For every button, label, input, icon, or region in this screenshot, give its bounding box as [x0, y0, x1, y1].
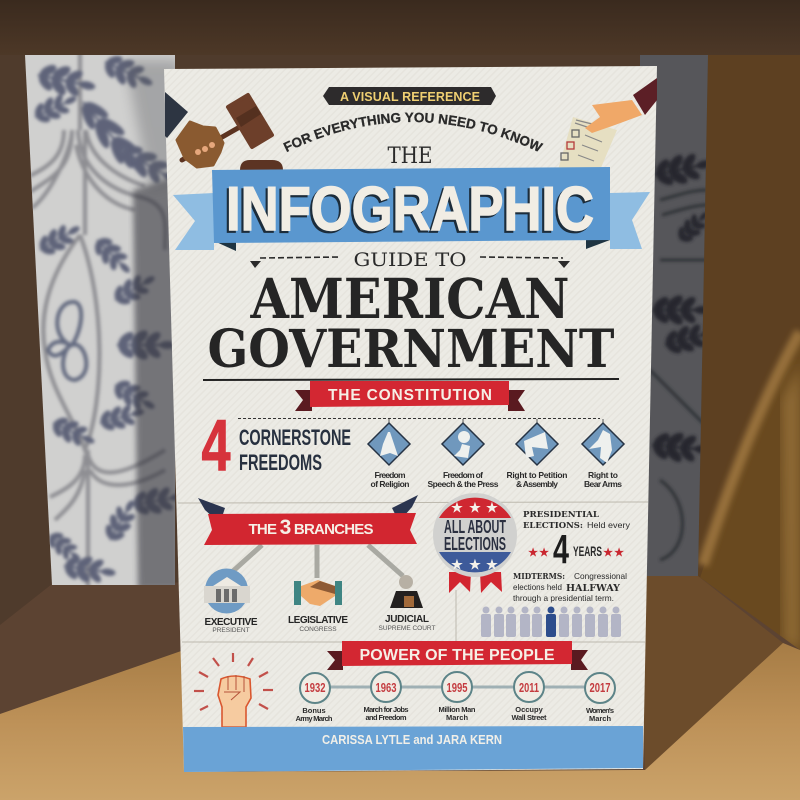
icon: legislative handshake: [294, 580, 342, 606]
heading: guide to with arrows: [250, 249, 570, 271]
text: presidential elections: Held every: [587, 520, 631, 530]
timeline of marches: Wall Street: [512, 713, 547, 722]
heading text: [239, 425, 351, 475]
icon: hand with gavel: [165, 92, 283, 170]
section: the 3 branches: [198, 495, 435, 634]
heading text: CORNERSTONE: [239, 425, 351, 450]
branch labels: SUPREME COURT: [379, 625, 435, 632]
branch labels: [204, 614, 435, 634]
timeline of marches: and Freedom: [366, 713, 407, 722]
banner: the constitution: THE CONSTITUTION: [328, 387, 492, 404]
text: presidential elections: elections held: [513, 582, 562, 592]
connector lines: [232, 545, 403, 578]
title: american government: [208, 266, 615, 380]
badge: all about elections: ELECTIONS: [444, 534, 506, 554]
text: presidential elections: ELECTIONS:: [523, 521, 583, 531]
patterned curtain, lit side: [25, 55, 175, 585]
stat: 4 years: [528, 526, 624, 572]
banner: the constitution: [295, 381, 525, 411]
branch labels: EXECUTIVE: [204, 617, 258, 628]
timeline of marches: March: [446, 713, 468, 722]
subtitle on arc: FOR EVERYTHING YOU NEED TO KNOW: [283, 112, 544, 152]
icon: raised fist: [194, 653, 273, 727]
timeline of marches: Army March: [296, 714, 333, 723]
title: american government: AMERICAN: [250, 266, 570, 331]
word: THE: THE: [388, 144, 432, 169]
freedom labels: of Religion: [370, 479, 410, 489]
timeline of marches: 2017: [590, 680, 610, 695]
timeline of marches: Bonus: [302, 706, 326, 715]
stat: 4 years: ★: [539, 547, 549, 559]
stat: 4 years: ★: [603, 547, 613, 559]
patterned curtain, shaded side: [640, 55, 708, 576]
heading text: FREEDOMS: [239, 450, 322, 475]
badge: all about elections: ★: [486, 557, 498, 572]
freedom labels: Bear Arms: [584, 479, 622, 489]
number 4: 4: [202, 406, 230, 486]
timeline of marches: Occupy: [515, 705, 544, 714]
banner: infographic: INFOGRAPHIC: [226, 175, 594, 244]
timeline of marches: 2011: [519, 680, 539, 695]
freedom labels: Freedom: [374, 470, 406, 480]
freedom labels: & Assembly: [516, 479, 558, 489]
badge: a visual reference: [323, 87, 496, 105]
icon: freedom of speech: [442, 423, 484, 465]
branch labels: CONGRESS: [299, 626, 337, 633]
badge: all about elections: ★: [469, 500, 481, 515]
text: presidential elections: HALFWAY: [566, 583, 620, 594]
timeline of marches: March for Jobs: [364, 705, 408, 714]
stat: 4 years: ★: [528, 547, 538, 559]
section: 4 cornerstone freedoms: [202, 406, 624, 489]
badge: all about elections: ★: [486, 500, 498, 515]
footer band: authors: [183, 726, 643, 772]
title: american government: GOVERNMENT: [208, 319, 615, 380]
timeline of marches: 1995: [446, 680, 468, 695]
book cover: [164, 66, 657, 772]
freedom labels: [370, 470, 622, 489]
badge: a visual reference: A VISUAL REFERENCE: [340, 90, 480, 104]
stat: 4 years: ★: [614, 547, 624, 559]
banner: power of the people: [327, 641, 588, 670]
timeline of marches: 1932: [304, 680, 326, 695]
timeline of marches: March: [589, 714, 611, 723]
badge: all about elections: ★: [451, 500, 463, 515]
icon: executive building: [204, 568, 250, 614]
banner: power of the people: POWER OF THE PEOPLE: [360, 647, 555, 664]
icon: hand marking ballot: [558, 78, 657, 170]
section: the 3 branches: THE 3 BRANCHES: [248, 516, 374, 539]
badge: all about elections: [433, 493, 517, 593]
branch labels: PRESIDENT: [212, 627, 250, 634]
stat: 4 years: 4: [553, 526, 569, 572]
freedom labels: Speech & the Press: [428, 479, 499, 489]
stat: 4 years: YEARS: [573, 543, 602, 559]
freedom labels: Freedom of: [443, 470, 483, 480]
text: presidential elections: through a presidential term.: [513, 593, 614, 603]
timeline of marches: Million Man: [438, 705, 476, 714]
ribbon: [204, 513, 417, 545]
heading: guide to with arrows: GUIDE TO: [354, 249, 466, 271]
cover paper: [164, 66, 657, 772]
text: presidential elections: PRESIDENTIAL: [523, 510, 599, 520]
freedom labels: Right to Petition: [506, 470, 568, 480]
badge: all about elections: ★: [469, 557, 481, 572]
timeline of marches: 1963: [376, 680, 396, 695]
icon: judicial judge: [390, 575, 423, 608]
badge: all about elections: ALL ABOUT: [444, 517, 506, 537]
branch labels: JUDICIAL: [385, 614, 429, 625]
footer band: authors: CARISSA LYTLE and JARA KERN: [322, 732, 502, 747]
icon: right to bear arms: [582, 423, 624, 465]
icon: eagle wings: [198, 495, 418, 518]
chart: row of eleven people: [481, 606, 621, 637]
icon: freedom of religion: [368, 423, 410, 465]
text: presidential elections: MIDTERMS:: [513, 571, 565, 581]
timeline of marches: [296, 672, 615, 723]
text: presidential elections: Congressional: [574, 571, 627, 581]
timeline of marches: Women's: [586, 706, 614, 715]
badge: all about elections: ★: [451, 557, 463, 572]
branch labels: LEGISLATIVE: [288, 615, 348, 626]
icon: right to petition: [516, 423, 558, 465]
freedom labels: Right to: [588, 470, 618, 480]
banner: infographic: INFOGRAPHIC: [224, 177, 592, 246]
text: presidential elections: [513, 510, 631, 603]
